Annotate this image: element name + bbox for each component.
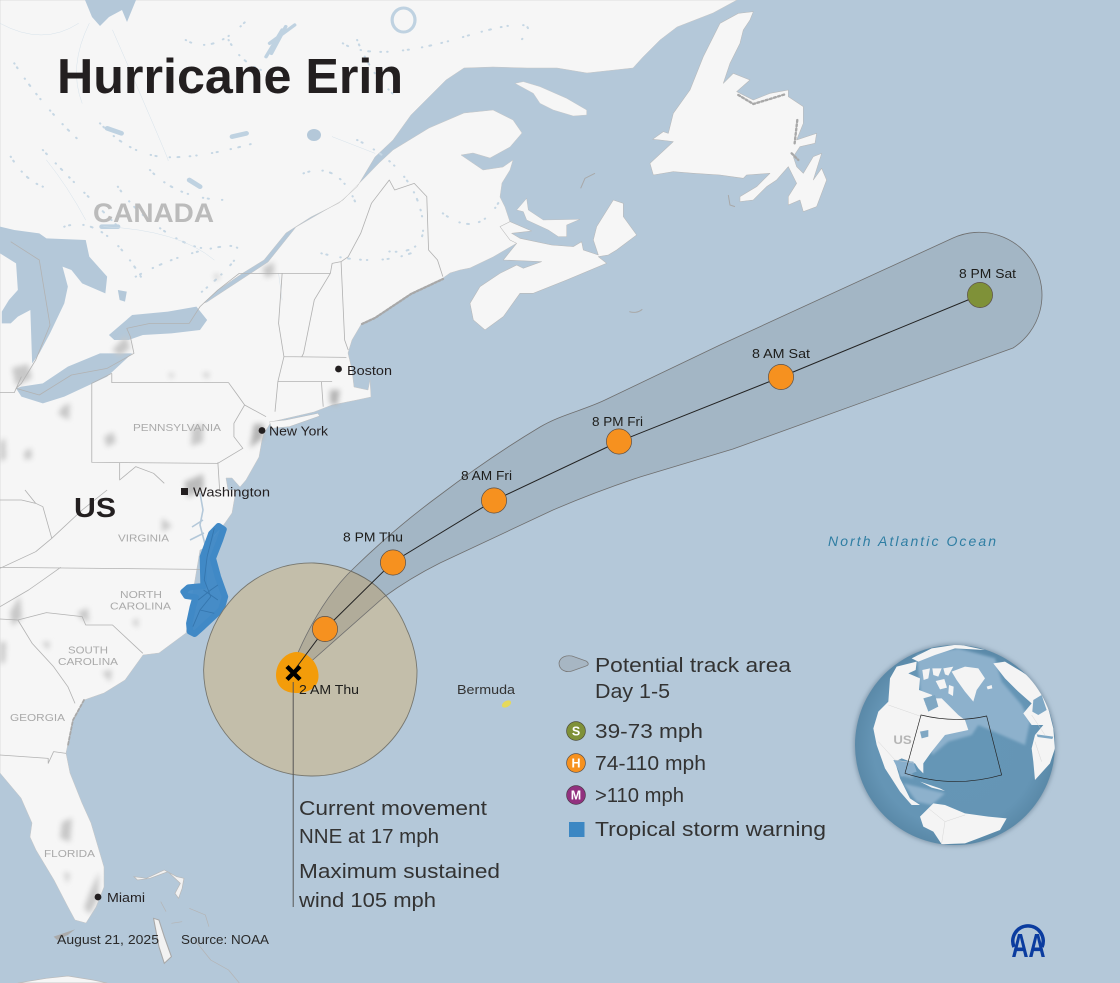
marker: 8 PM Fri xyxy=(606,429,632,454)
label: 8 AM Fri: 8 AM Fri xyxy=(461,468,512,483)
date and source xyxy=(57,932,269,947)
urban: Pittsburgh and Pennsylvania xyxy=(24,424,203,460)
land: Prince Edward Island xyxy=(517,198,580,237)
globe: Hudson Bay and lakes xyxy=(920,695,938,738)
land: Bahamas and Cuba xyxy=(18,870,239,983)
state: North Carolina xyxy=(110,589,171,612)
country label: US: US xyxy=(74,492,116,523)
state: Virginia: VIRGINIA xyxy=(118,532,169,544)
globe: Caribbean islands xyxy=(920,782,945,791)
lakes: scattered small lakes xyxy=(11,17,528,293)
coast: Georgia shoreline xyxy=(68,700,84,745)
water: Chesapeake Bay xyxy=(190,493,206,548)
base map: urban areas xyxy=(0,262,340,914)
label: 8 PM Sat: 8 PM Sat xyxy=(959,266,1016,281)
coast: Maine shoreline xyxy=(362,279,443,324)
globe: continental shelves xyxy=(898,648,1030,805)
land: Anticosti Island xyxy=(515,82,587,116)
country label: Canada: CANADA xyxy=(93,198,214,228)
urban: Georgia and Florida xyxy=(0,642,99,914)
rivers: pale river lines xyxy=(0,23,375,300)
globe: Iceland xyxy=(987,685,992,689)
globe surface xyxy=(873,644,1055,844)
globe: Arctic cap and islands xyxy=(912,644,985,696)
state: Georgia: GEORGIA xyxy=(10,712,65,724)
state labels xyxy=(10,422,221,860)
legend: over 110 mph: >110 mph xyxy=(595,784,684,807)
legend: tropical storm warning: Tropical storm warning xyxy=(595,818,826,841)
water: James Bay xyxy=(85,0,136,26)
city: Miami xyxy=(95,890,145,905)
globe shadow xyxy=(854,644,1056,846)
city: Washington: Washington xyxy=(193,484,270,500)
state: North Carolina: NORTH xyxy=(120,589,162,601)
wind field area xyxy=(204,563,417,776)
state: Florida: FLORIDA xyxy=(44,848,95,860)
land: Newfoundland xyxy=(650,12,827,212)
globe: Greenland xyxy=(952,667,985,702)
label: 8 PM Thu: 8 PM Thu xyxy=(343,530,403,544)
warning area coastline detail xyxy=(193,528,218,627)
base map: inland water xyxy=(0,0,321,548)
forecast track line xyxy=(293,295,980,672)
icon: current position cross xyxy=(287,666,300,680)
borders: Northeast US xyxy=(0,180,443,490)
lakes: Manicouagan ring xyxy=(392,8,415,32)
globe: South America xyxy=(920,803,1007,844)
globe: Europe and Africa xyxy=(993,662,1055,780)
island: Bermuda: Bermuda xyxy=(457,682,516,697)
label: 8 AM Sat: 8 AM Sat xyxy=(752,346,810,361)
forecast point markers xyxy=(312,282,993,642)
callout: current movement xyxy=(299,797,487,848)
globe ocean xyxy=(855,645,1055,845)
globe: Baltic and Mediterranean xyxy=(1032,695,1053,739)
city: Boston: Boston xyxy=(347,363,392,378)
land: small Gulf islands xyxy=(581,173,735,312)
current storm wind core xyxy=(276,652,319,693)
state: Pennsylvania: PENNSYLVANIA xyxy=(133,422,221,434)
urban: Boston and New York corridor xyxy=(250,390,340,448)
coast: Newfoundland bays xyxy=(738,94,798,160)
source: Source: NOAA xyxy=(181,932,269,947)
callout: maximum sustained wind: Maximum sustained xyxy=(299,860,500,883)
state: South Carolina: CAROLINA xyxy=(58,656,118,668)
globe: map extent frame xyxy=(905,715,1002,782)
legend: 74-110 mph: 74-110 mph xyxy=(595,752,706,775)
globe: North America xyxy=(873,662,968,805)
base map: land xyxy=(0,0,827,983)
callout: storm movement and wind xyxy=(298,797,500,912)
marker: 8 PM Sat xyxy=(967,282,993,308)
label: 8 PM Fri: 8 PM Fri xyxy=(592,414,643,429)
legend: 39-73 mph: 39-73 mph xyxy=(595,720,703,743)
legend: potential track area xyxy=(559,654,792,703)
date: August 21, 2025 xyxy=(57,932,159,947)
potential track area xyxy=(292,232,1042,673)
city: New York: New York xyxy=(269,424,329,438)
Anadolu Agency logo xyxy=(1012,926,1046,964)
water: Lake Saint-Jean xyxy=(307,129,321,141)
water: Lake Huron and Georgian Bay xyxy=(0,227,107,363)
water: Lake Erie xyxy=(16,353,132,403)
legend xyxy=(559,654,826,841)
logo arc xyxy=(1013,926,1043,947)
warning area fill xyxy=(184,526,225,634)
city: Miami: Miami xyxy=(107,890,145,905)
title: Hurricane Erin xyxy=(57,50,403,104)
state: South Carolina xyxy=(58,644,118,668)
urban: Carolinas and Virginia xyxy=(10,518,172,682)
urban: Toronto and Ontario cities xyxy=(112,336,210,379)
marker: 8 AM Sat xyxy=(768,364,794,390)
land: Nova Scotia and Cape Breton xyxy=(470,200,637,330)
marker: 8 AM Fri xyxy=(481,488,507,513)
forecast time labels xyxy=(299,266,1016,697)
legend: potential track area: Potential track area xyxy=(595,654,792,677)
globe: borders xyxy=(878,705,1045,843)
callout: maximum sustained wind: wind 105 mph xyxy=(298,889,436,912)
water: Lake Nipissing xyxy=(118,290,127,302)
urban: Detroit and Ohio xyxy=(0,364,70,462)
urban: Montreal and Quebec xyxy=(214,262,274,281)
legend: over 110 mph: M xyxy=(571,788,581,802)
leader line from storm xyxy=(292,682,294,907)
callout: current movement: Current movement xyxy=(299,797,487,820)
legend: 74-110 mph: H xyxy=(571,756,581,770)
land: North American mainland xyxy=(0,0,737,923)
ocean label: North Atlantic Ocean xyxy=(828,533,996,549)
borders: Southeast US xyxy=(0,490,200,763)
globe: US label: US xyxy=(893,733,912,747)
island: Bermuda xyxy=(457,682,516,709)
locator globe xyxy=(854,644,1056,846)
urban: Washington and Baltimore xyxy=(184,474,204,498)
label: 2 AM Thu: 2 AM Thu xyxy=(299,682,359,697)
land: Long Island xyxy=(270,413,320,428)
state: North Carolina: CAROLINA xyxy=(110,600,171,612)
callout: current movement: NNE at 17 mph xyxy=(299,825,439,848)
water: Lake Ontario xyxy=(109,307,207,340)
legend: potential track area: Day 1-5 xyxy=(595,680,670,703)
marker: 8 PM Thu xyxy=(380,550,406,575)
legend: 39-73 mph: S xyxy=(572,724,580,738)
base map: rugged coast shading xyxy=(68,94,798,745)
marker: early Thu xyxy=(312,616,338,642)
state: South Carolina: SOUTH xyxy=(68,644,108,656)
base map: state and national borders xyxy=(0,180,443,763)
lakes: Mistassini streaks xyxy=(266,25,295,57)
base map: lakes and rivers scatter xyxy=(0,8,528,300)
globe: Gulf of Mexico shallows xyxy=(893,760,917,777)
logo letters: AA xyxy=(1012,927,1046,964)
place labels: cities xyxy=(95,363,516,905)
callout: maximum sustained wind xyxy=(298,860,500,912)
tropical storm warning area xyxy=(184,526,225,634)
